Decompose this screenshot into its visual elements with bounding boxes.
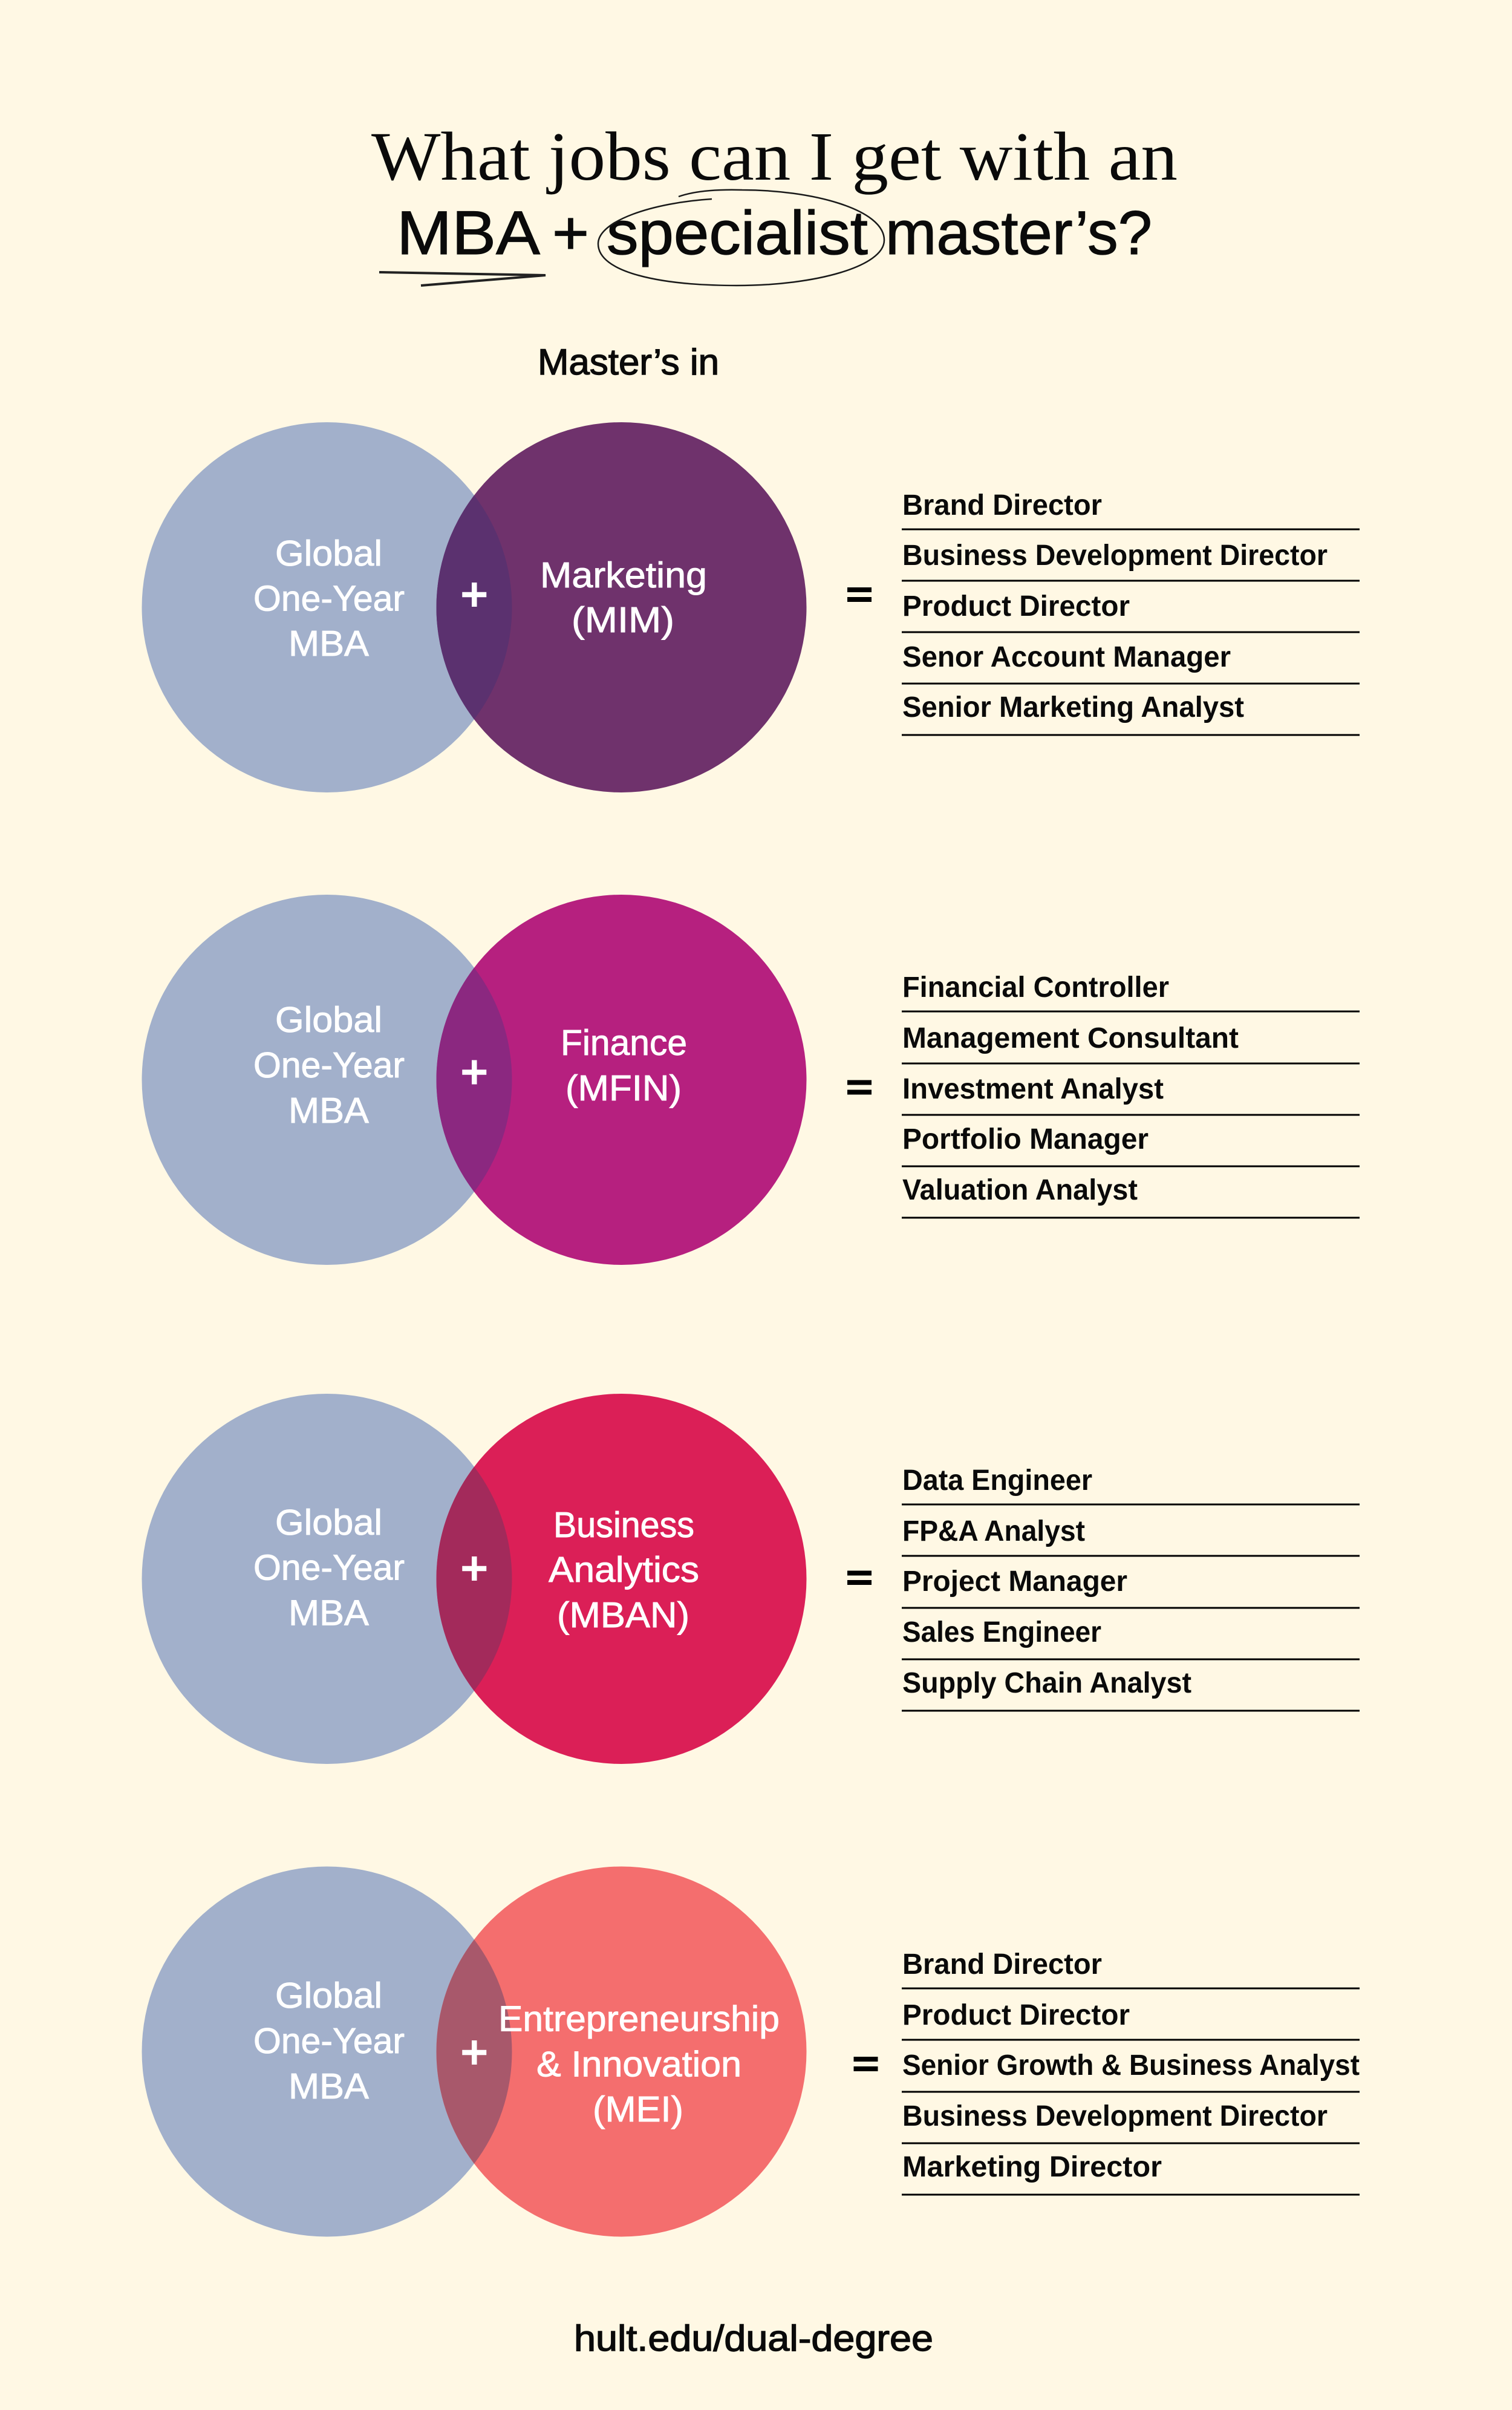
job: Project Manager: Project Manager xyxy=(902,1566,1127,1598)
hand-drawn underline under MBA xyxy=(379,272,546,286)
icon: equals xyxy=(847,1570,872,1585)
title word: master's?: master’s? xyxy=(885,198,1152,267)
icon: plus xyxy=(462,1060,486,1084)
label: Business Analytics (MBAN) xyxy=(549,1505,699,1635)
circle: Global One-Year MBA xyxy=(142,1394,512,1764)
title xyxy=(371,118,1178,286)
job: Valuation Analyst: Valuation Analyst xyxy=(902,1174,1138,1206)
title word: MBA: MBA xyxy=(397,198,540,267)
circle overlap xyxy=(437,1467,512,1691)
job: Brand Director: Brand Director xyxy=(902,489,1102,521)
job: Business Development Director: Business Development Director xyxy=(902,2100,1328,2132)
job: Senior Marketing Analyst: Senior Marketing Analyst xyxy=(902,691,1244,723)
label: Global One-Year MBA xyxy=(253,1503,405,1633)
job: Product Director: Product Director xyxy=(902,1999,1130,2031)
icon: plus xyxy=(462,583,486,607)
label: Entrepreneurship & Innovation (MEI) xyxy=(498,1999,780,2129)
job: Financial Controller: Financial Controller xyxy=(902,972,1169,1004)
label: Global One-Year MBA: Global xyxy=(275,1000,382,1040)
venn diagram: MBA + Business Analytics xyxy=(142,1394,807,1764)
title word: specialist: specialist xyxy=(607,198,868,267)
circle: Business Analytics xyxy=(437,1394,807,1764)
job: Senior Growth & Business Analyst: Senior Growth & Business Analyst xyxy=(902,2049,1360,2082)
circle: Global One-Year MBA xyxy=(142,895,512,1265)
job: Portfolio Manager: Portfolio Manager xyxy=(902,1123,1149,1155)
label: Global One-Year MBA: Global xyxy=(275,1976,382,2016)
circle overlap xyxy=(437,968,512,1192)
label: Finance (MFIN): (MFIN) xyxy=(565,1068,682,1108)
circle: Marketing xyxy=(437,422,807,792)
label: Global One-Year MBA: One-Year xyxy=(253,578,405,618)
label: Marketing (MIM) xyxy=(540,555,707,640)
label: Entrepreneurship & Innovation (MEI): & Innovation xyxy=(536,2045,741,2085)
footer url: hult.edu/dual-degree xyxy=(574,2318,933,2359)
venn diagram: MBA + Entrepreneurship & Innovation xyxy=(142,1867,807,2237)
label: Global One-Year MBA: One-Year xyxy=(253,2021,405,2061)
panel: Marketing row xyxy=(142,422,1360,792)
job list: Marketing xyxy=(902,489,1360,735)
panel: Entrepreneurship & Innovation row xyxy=(142,1867,1360,2237)
hand-drawn circle around specialist xyxy=(598,190,884,286)
label: Marketing (MIM): (MIM) xyxy=(572,600,674,640)
job: Investment Analyst: Investment Analyst xyxy=(902,1073,1164,1105)
job: FP&A Analyst: FP&A Analyst xyxy=(902,1515,1085,1547)
label: Global One-Year MBA: MBA xyxy=(288,1593,370,1633)
label: Global One-Year MBA: MBA xyxy=(288,1091,370,1131)
label: Global One-Year MBA xyxy=(253,1000,405,1131)
label: Finance (MFIN): Finance xyxy=(561,1023,687,1063)
circle: Entrepreneurship & Innovation xyxy=(437,1867,807,2237)
job: Senor Account Manager: Senor Account Manager xyxy=(902,641,1231,673)
circle: Global One-Year MBA xyxy=(142,422,512,792)
label: Business Analytics (MBAN): (MBAN) xyxy=(557,1595,689,1635)
job: Business Development Director: Business Development Director xyxy=(902,540,1328,572)
label: Global One-Year MBA: Global xyxy=(275,534,382,573)
icon: plus xyxy=(462,1556,486,1581)
circle: Finance xyxy=(437,895,807,1265)
venn diagram: MBA + Marketing xyxy=(142,422,807,792)
title line 1: What jobs can I get with an xyxy=(371,118,1178,195)
job list: Entrepreneurship & Innovation xyxy=(902,1948,1360,2195)
icon: equals xyxy=(847,587,872,602)
label: Entrepreneurship & Innovation (MEI): (MEI) xyxy=(593,2089,683,2129)
label: Marketing (MIM): Marketing xyxy=(540,555,707,595)
label: Global One-Year MBA: One-Year xyxy=(253,1045,405,1085)
job: Brand Director: Brand Director xyxy=(902,1948,1102,1981)
label: Global One-Year MBA: MBA xyxy=(288,2066,370,2106)
label: Finance (MFIN) xyxy=(561,1023,687,1108)
icon: equals xyxy=(847,1080,872,1095)
label: Global One-Year MBA xyxy=(253,534,405,664)
job: Supply Chain Analyst: Supply Chain Analyst xyxy=(902,1667,1191,1699)
label: Global One-Year MBA xyxy=(253,1976,405,2106)
job list: Business Analytics xyxy=(902,1465,1360,1711)
circle overlap xyxy=(437,495,512,719)
job: Marketing Director: Marketing Director xyxy=(902,2151,1162,2183)
label: Global One-Year MBA: MBA xyxy=(288,624,370,664)
panel: Finance row xyxy=(142,895,1360,1265)
title plus sign: + xyxy=(552,198,589,267)
label: Business Analytics (MBAN): Analytics xyxy=(549,1550,699,1590)
label: Entrepreneurship & Innovation (MEI): Entrepreneurship xyxy=(498,1999,780,2039)
label: Global One-Year MBA: One-Year xyxy=(253,1547,405,1587)
icon: equals xyxy=(854,2057,878,2071)
job list: Finance xyxy=(902,972,1360,1218)
panel: Business Analytics row xyxy=(142,1394,1360,1764)
job: Data Engineer: Data Engineer xyxy=(902,1465,1092,1497)
label: Global One-Year MBA: Global xyxy=(275,1503,382,1543)
job: Management Consultant: Management Consultant xyxy=(902,1022,1239,1054)
circle overlap xyxy=(437,1939,512,2164)
icon: plus xyxy=(462,2040,486,2065)
job: Sales Engineer: Sales Engineer xyxy=(902,1616,1101,1648)
label: Business Analytics (MBAN): Business xyxy=(553,1505,694,1545)
venn diagram: MBA + Finance xyxy=(142,895,807,1265)
job: Product Director: Product Director xyxy=(902,590,1130,622)
heading: Master's in: Master’s in xyxy=(538,342,719,382)
circle: Global One-Year MBA xyxy=(142,1867,512,2237)
